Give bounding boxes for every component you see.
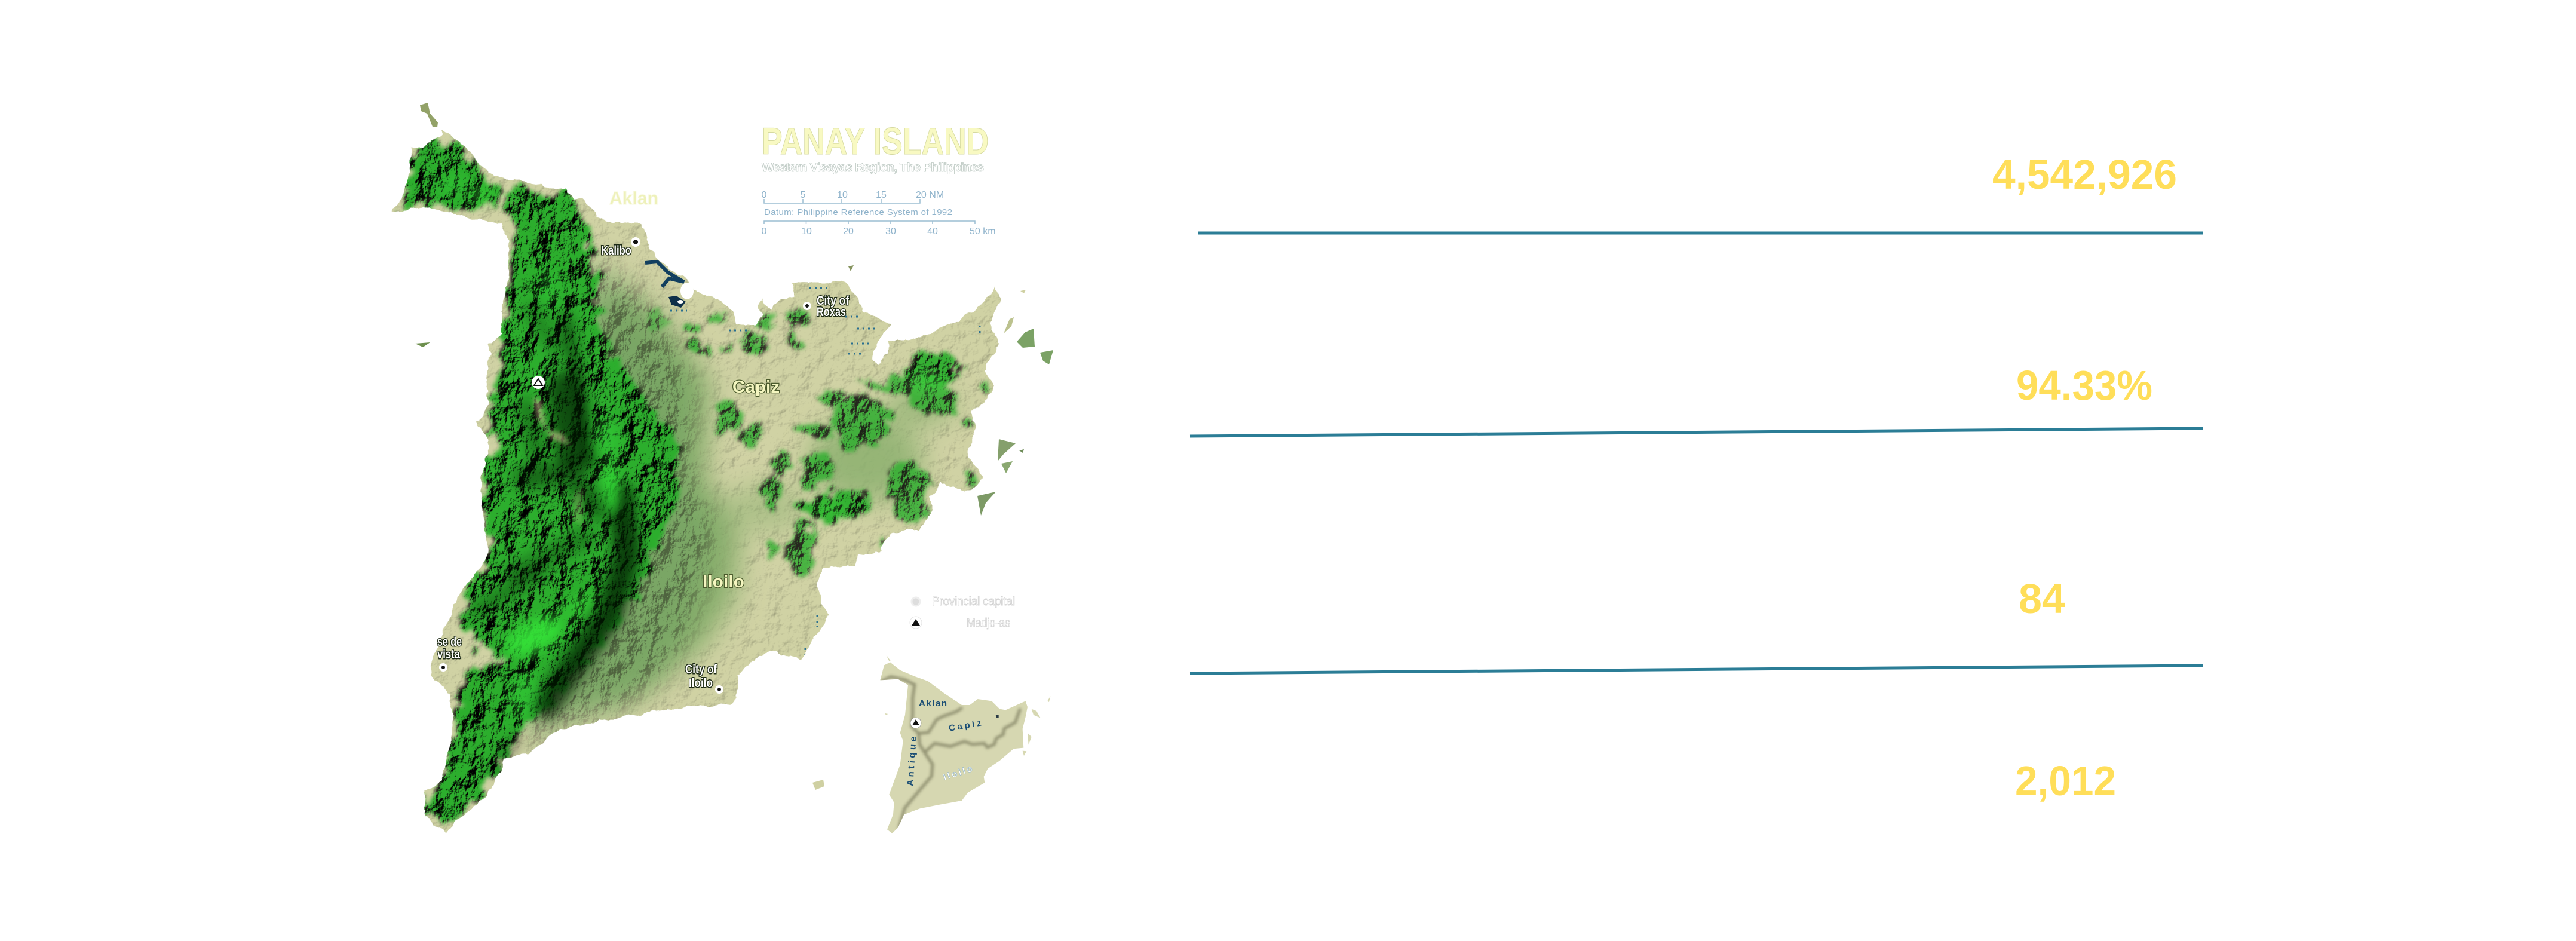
city: Roxas: City of bbox=[817, 294, 850, 308]
city: Roxas: Roxas bbox=[817, 305, 846, 319]
city: San Jose de Buenavista fragment bbox=[437, 635, 462, 670]
scale bar: nautical miles: 5 bbox=[801, 190, 806, 200]
city: Roxas bbox=[804, 294, 850, 319]
divider line 3 bbox=[1190, 666, 2203, 673]
datum note: Datum: Philippine Reference System of 1992 bbox=[764, 207, 952, 217]
stat: 2,012: 2,012 bbox=[2015, 758, 2116, 804]
inset: province map bbox=[860, 645, 1059, 844]
divider line 1 bbox=[1198, 232, 2203, 234]
icon: mountain marker bbox=[532, 376, 545, 389]
province label: Capiz: Capiz bbox=[732, 378, 780, 397]
islets bbox=[415, 103, 1053, 790]
divider line 2 bbox=[1190, 428, 2203, 436]
stat: 84: 84 bbox=[2019, 575, 2065, 622]
province label: Aklan: Aklan bbox=[609, 188, 658, 209]
stat: 4,542,926: 4,542,926 bbox=[1992, 151, 2177, 198]
scale bar: kilometres: 30 bbox=[885, 226, 896, 237]
scale bar: nautical miles: 20 NM bbox=[916, 190, 944, 200]
scale bar: kilometres: 40 bbox=[927, 226, 938, 237]
inset icon: mountain bbox=[910, 718, 921, 728]
city: San Jose de Buenavista fragment: se de bbox=[437, 635, 462, 649]
legend: Provincial capital bbox=[932, 595, 1015, 608]
scale bar: kilometres: 50 km bbox=[970, 226, 996, 237]
city: Iloilo: Iloilo bbox=[689, 676, 713, 690]
city: Kalibo: Kalibo bbox=[601, 244, 631, 258]
legend bbox=[910, 595, 1015, 630]
inset label: Antique: Antique bbox=[905, 736, 919, 786]
scale bar: nautical miles: 15 bbox=[876, 190, 887, 200]
scale bar: kilometres: 0 bbox=[762, 226, 767, 237]
city: Iloilo: City of bbox=[685, 663, 717, 676]
province label: Iloilo: Iloilo bbox=[703, 572, 744, 591]
map subtitle: Western Visayas Region, The Philippines bbox=[762, 161, 984, 174]
inset label: Capiz: Capiz bbox=[948, 718, 982, 734]
inset label: Aklan: Aklan bbox=[919, 698, 947, 709]
scale bar: nautical miles bbox=[762, 190, 944, 203]
map title: PANAY ISLAND bbox=[762, 121, 989, 163]
scale bar: kilometres: 10 bbox=[801, 226, 812, 237]
inset label: Iloilo: Iloilo bbox=[942, 764, 974, 783]
scale bar: nautical miles: 0 bbox=[762, 190, 767, 200]
scale bar: nautical miles: 10 bbox=[837, 190, 848, 200]
scale bar: kilometres: 20 bbox=[843, 226, 854, 237]
panel: terrain map of Panay bbox=[358, 90, 1075, 854]
legend: Madjo-as bbox=[967, 617, 1010, 630]
page canvas bbox=[392, 103, 2203, 833]
island relief bbox=[392, 130, 1001, 833]
city: San Jose de Buenavista fragment: vista bbox=[437, 648, 460, 661]
scale bar: kilometres bbox=[762, 221, 996, 237]
city: Iloilo bbox=[685, 663, 722, 692]
stat: 94.33%: 94.33% bbox=[2016, 362, 2152, 409]
